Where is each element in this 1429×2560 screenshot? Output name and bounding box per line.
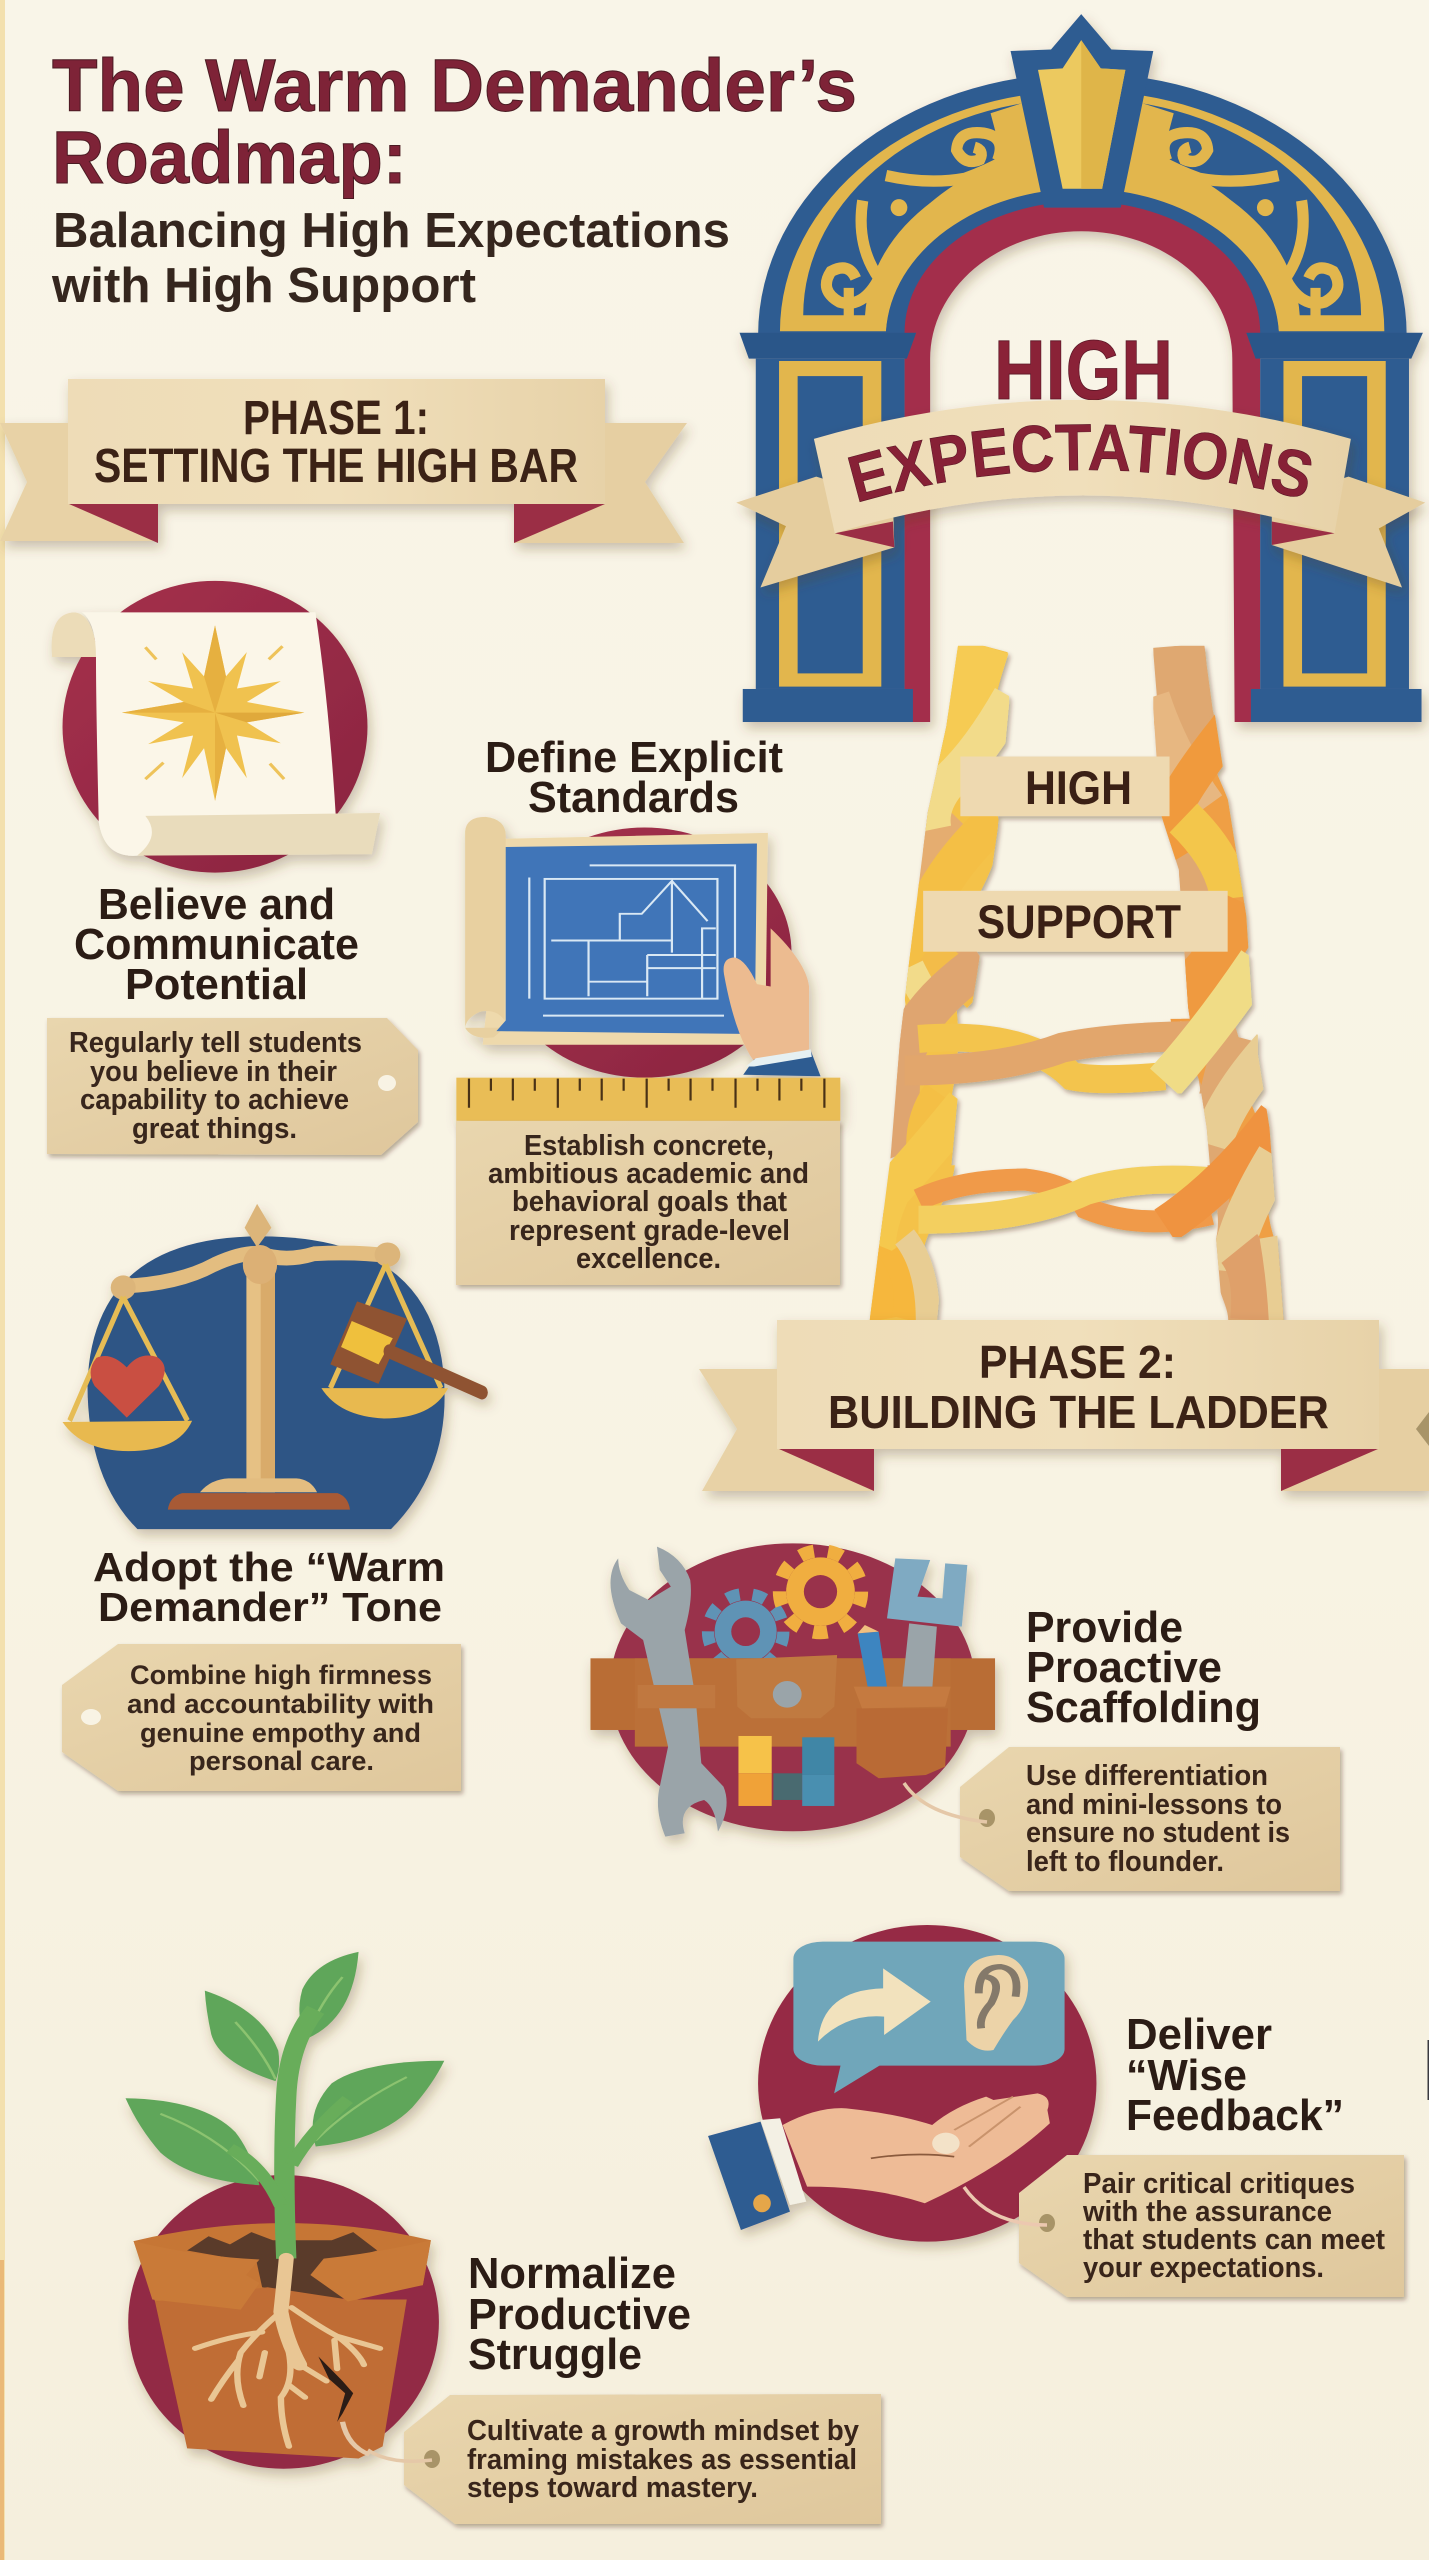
banner: phase 2: PHASE 2:	[979, 1336, 1176, 1388]
icon: blueprint and ruler	[456, 817, 840, 1121]
icon: scroll with star	[52, 581, 380, 873]
heading: believe and communicate potential: Communicate	[74, 920, 359, 969]
heading: provide proactive scaffolding	[1026, 1603, 1261, 1732]
tag: scaffolding: Use differentiation	[1026, 1760, 1268, 1792]
banner: phase 1	[0, 379, 687, 543]
banner: phase 2	[699, 1320, 1429, 1491]
tag: normalize	[368, 2394, 881, 2524]
tag: define standards: ambitious academic and	[488, 1158, 809, 1190]
arch word: high: HIGH	[994, 323, 1173, 417]
arch: high expectations	[736, 14, 1429, 735]
heading: provide proactive scaffolding: Provide	[1026, 1603, 1183, 1652]
tag: believe: great things.	[132, 1113, 297, 1145]
tag: feedback: that students can meet	[1083, 2224, 1385, 2256]
tag: scaffolding: and mini-lessons to	[1026, 1789, 1282, 1821]
icon: feedback bubble and hand	[708, 1925, 1096, 2242]
tag: define standards: Establish concrete,	[524, 1130, 774, 1162]
tag: normalize: Cultivate a growth mindset by	[467, 2415, 859, 2447]
title: with High Support	[51, 259, 476, 313]
heading: define explicit standards: Standards	[528, 773, 739, 822]
tag: define standards	[456, 1121, 840, 1285]
tag: scaffolding	[904, 1747, 1340, 1891]
tag: believe: capability to achieve	[80, 1084, 349, 1116]
title: Roadmap:	[52, 116, 407, 199]
tag: feedback: Pair critical critiques	[1083, 2168, 1355, 2200]
tag: adopt: genuine empothy and	[140, 1718, 421, 1748]
arch: high expectations: EXPECTATIONS	[848, 424, 1312, 502]
heading: provide proactive scaffolding: Scaffolding	[1026, 1683, 1261, 1732]
heading: adopt the warm demander tone	[93, 1544, 445, 1630]
title	[51, 44, 857, 313]
tag: define standards: excellence.	[576, 1243, 721, 1275]
heading: deliver wise feedback: “Wise	[1126, 2051, 1247, 2100]
banner: phase 1: PHASE 1:	[243, 392, 429, 445]
heading: deliver wise feedback: Deliver	[1126, 2010, 1272, 2059]
tag: believe: you believe in their	[90, 1056, 337, 1088]
tag: normalize: framing mistakes as essential	[467, 2444, 857, 2476]
tag: normalize: steps toward mastery.	[467, 2472, 758, 2504]
icon: balance scale with heart and gavel	[62, 1204, 482, 1529]
tag: scaffolding: left to flounder.	[1026, 1846, 1224, 1878]
title: Balancing High Expectations	[53, 204, 730, 258]
tag: believe: Regularly tell students	[69, 1027, 362, 1059]
heading: normalize productive struggle: Struggle	[468, 2330, 642, 2379]
heading: adopt the warm demander tone: Adopt the “Warm	[93, 1544, 445, 1590]
heading: believe and communicate potential: Potential	[125, 960, 308, 1009]
tag: adopt: and accountability with	[127, 1689, 434, 1719]
ladder label: support: SUPPORT	[977, 895, 1181, 948]
ladder: high support	[876, 646, 1279, 1320]
tag: feedback: your expectations.	[1083, 2252, 1324, 2284]
icon: plant in cracked pot	[126, 1952, 444, 2469]
tag: believe	[47, 1018, 418, 1155]
ladder label: high: HIGH	[1025, 761, 1132, 814]
heading: normalize productive struggle: Normalize	[468, 2249, 676, 2298]
tag: define standards: behavioral goals that	[512, 1186, 787, 1218]
heading: deliver wise feedback: Feedback”	[1126, 2091, 1344, 2140]
banner: phase 1: SETTING THE HIGH BAR	[94, 440, 578, 493]
banner: phase 2: BUILDING THE LADDER	[828, 1386, 1329, 1438]
title: The Warm Demander’s	[52, 44, 857, 127]
tag: adopt	[62, 1644, 461, 1791]
tag: adopt: personal care.	[189, 1746, 374, 1776]
heading: deliver wise feedback	[1126, 2010, 1344, 2140]
heading: normalize productive struggle	[468, 2249, 691, 2379]
heading: believe and communicate potential: Believe and	[98, 880, 335, 929]
heading: believe and communicate potential	[74, 880, 359, 1009]
heading: define explicit standards: Define Explicit	[485, 733, 783, 782]
heading: provide proactive scaffolding: Proactive	[1026, 1643, 1222, 1692]
tag: feedback	[964, 2155, 1404, 2297]
tag: define standards: represent grade-level	[509, 1215, 790, 1247]
heading: normalize productive struggle: Productive	[468, 2290, 691, 2339]
tag: feedback: with the assurance	[1082, 2196, 1332, 2228]
icon: tool belt with gears	[590, 1543, 995, 1837]
heading: adopt the warm demander tone: Demander” Tone	[98, 1584, 442, 1630]
heading: define explicit standards	[485, 733, 783, 822]
tag: adopt: Combine high firmness	[130, 1660, 432, 1690]
tag: scaffolding: ensure no student is	[1026, 1817, 1290, 1849]
